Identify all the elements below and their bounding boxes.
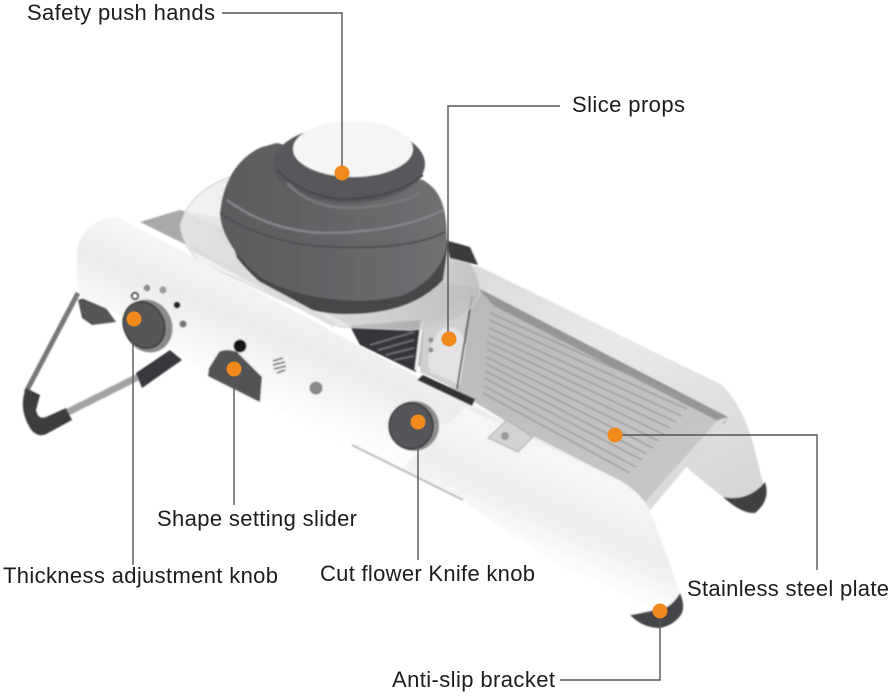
cut flower knife knob	[389, 401, 439, 451]
clear guard	[180, 175, 480, 330]
label: stainless steel plate: Stainless steel plate	[687, 576, 889, 601]
label: thickness adjustment knob: Thickness adjustment knob	[3, 563, 278, 588]
safety push hands	[220, 121, 448, 314]
label: safety push hands: Safety push hands	[27, 0, 215, 25]
stainless steel plate	[140, 210, 728, 510]
leader lines	[133, 13, 817, 680]
shape setting slider	[208, 340, 322, 402]
product: mandoline slicer	[23, 121, 767, 628]
thickness adjustment knob	[115, 291, 181, 361]
dark slot by knob	[417, 375, 475, 406]
white body side panel	[77, 217, 682, 628]
orange marker dots	[126, 166, 668, 618]
folding stand leg	[23, 293, 182, 435]
label: shape setting slider: Shape setting slider	[157, 506, 357, 531]
black guide tab	[445, 240, 478, 265]
slice props panel	[416, 295, 472, 390]
thin tab on plate	[488, 420, 533, 452]
scale markers	[132, 285, 187, 328]
label: slice props: Slice props	[572, 92, 685, 117]
guard rail strip	[190, 247, 335, 325]
back rail	[140, 210, 767, 513]
blade grid opening	[350, 320, 422, 372]
anti-slip foot	[630, 593, 683, 628]
white body end	[400, 408, 682, 628]
label: cut flower knife knob: Cut flower Knife knob	[320, 561, 535, 586]
label: anti-slip bracket: Anti-slip bracket	[392, 667, 555, 692]
long slot	[352, 445, 463, 500]
back rail foot	[723, 482, 767, 513]
